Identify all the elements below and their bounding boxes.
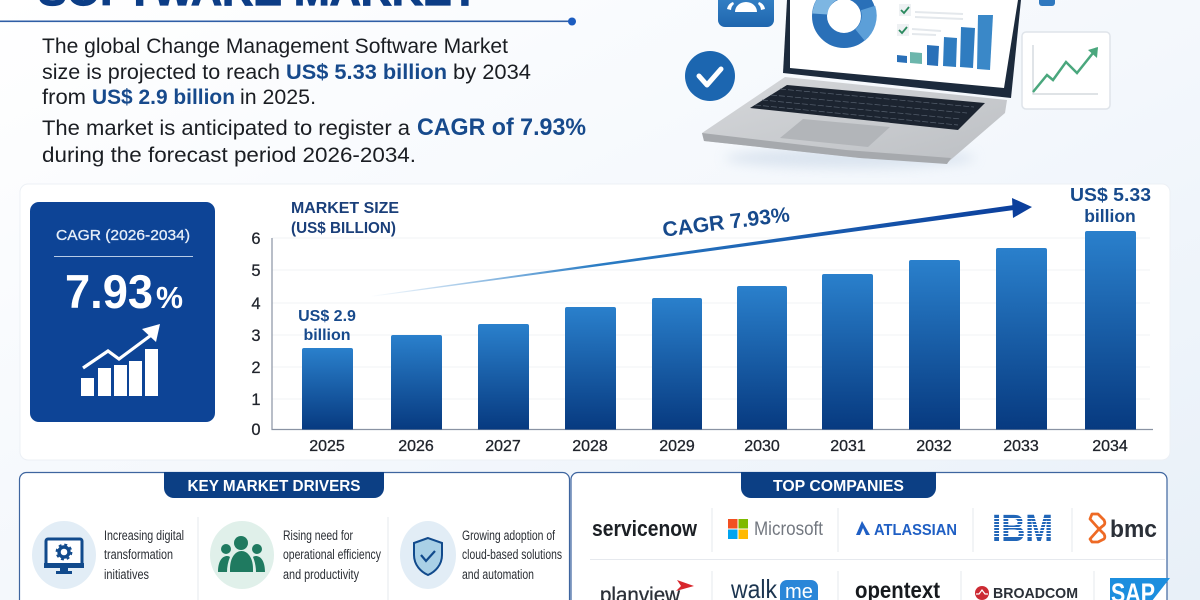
chart axis and grid: 6	[251, 230, 261, 248]
year labels: 2033	[1003, 438, 1039, 455]
CAGR trend arrow	[370, 198, 1032, 297]
intro text: from	[42, 86, 86, 109]
driver: digital transformation: Increasing digital	[104, 528, 184, 543]
screen bar chart	[897, 15, 993, 70]
driver: operational efficiency: Rising need for	[283, 528, 353, 543]
driver: cloud adoption: cloud-based solutions	[462, 547, 562, 562]
logo: BMC: bmc	[1110, 516, 1157, 543]
panel: CAGR card	[30, 202, 215, 422]
laptop shadow	[725, 148, 975, 168]
chart axis and grid: 5	[251, 262, 261, 280]
chart axis and grid: 4	[251, 295, 261, 313]
intro text: during the forecast period 2026-2034.	[42, 144, 416, 167]
year labels: 2034	[1092, 438, 1128, 455]
panel: key market drivers	[20, 472, 570, 600]
icon: monitor gear	[32, 521, 96, 589]
laptop illustration	[702, 0, 1021, 168]
label: 2025 value: billion	[303, 327, 351, 344]
logo: WalkMe	[730, 574, 818, 600]
label: 2034 value	[1070, 184, 1151, 226]
icon: check badge	[685, 51, 735, 101]
logo: Planview	[600, 580, 694, 600]
label: 2034 value: US$ 5.33	[1070, 184, 1151, 205]
intro text: by 2034	[453, 61, 531, 84]
icon: rising bars	[81, 324, 160, 396]
icon: people tile	[718, 0, 774, 27]
year labels: 2026	[398, 438, 434, 455]
heading: key market drivers: KEY MARKET DRIVERS	[188, 478, 360, 495]
heading: top companies	[741, 472, 936, 498]
icon: people	[210, 521, 274, 589]
year labels: 2025	[309, 438, 345, 455]
chart axis and grid	[251, 230, 1153, 439]
year labels	[309, 438, 1128, 455]
intro text: size is projected to reach	[42, 61, 280, 84]
chart axis and grid: 1	[251, 391, 261, 409]
label: 2025 value	[298, 308, 356, 344]
bar chart	[302, 231, 1136, 430]
growth card	[1022, 32, 1110, 109]
chart axis and grid: 0	[251, 421, 261, 439]
label: 2025 value: US$ 2.9	[298, 308, 356, 325]
chart axis and grid: 3	[251, 327, 261, 345]
label: 2034 value: billion	[1084, 206, 1136, 226]
driver: cloud adoption: and automation	[462, 567, 534, 582]
logo: Atlassian: ATLASSIAN	[874, 522, 957, 539]
intro text: The global Change Management Software Market	[42, 35, 508, 58]
intro text: US$ 5.33 billion	[286, 61, 447, 84]
intro text	[42, 35, 586, 167]
logo: IBM: IBM	[992, 508, 1053, 550]
intro text: The market is anticipated to register a	[42, 117, 410, 140]
icon: small blue tile	[1039, 0, 1055, 6]
logo: BMC	[1090, 514, 1157, 543]
year labels: 2028	[572, 438, 608, 455]
year labels: 2031	[830, 438, 866, 455]
driver: operational efficiency	[210, 521, 381, 589]
year labels: 2032	[916, 438, 952, 455]
chart title	[291, 200, 399, 237]
laptop screen	[783, 0, 1021, 98]
heading: key market drivers	[164, 472, 384, 498]
panel: top companies	[571, 472, 1170, 600]
intro text: US$ 2.9 billion	[92, 86, 235, 109]
chart title: (US$ BILLION)	[291, 220, 396, 237]
panel: CAGR card: %	[156, 280, 183, 315]
icon: shield check	[400, 521, 456, 589]
year labels: 2027	[485, 438, 521, 455]
heading: top companies: TOP COMPANIES	[773, 478, 904, 495]
title rule with dot	[0, 18, 576, 26]
year labels: 2030	[744, 438, 780, 455]
driver: cloud adoption: Growing adoption of	[462, 528, 555, 543]
checklist	[897, 4, 963, 36]
logo: Microsoft: Microsoft	[754, 519, 824, 540]
chart title: MARKET SIZE	[291, 200, 399, 217]
driver: digital transformation	[32, 521, 184, 589]
panel: chart	[20, 184, 1170, 460]
driver: digital transformation: transformation	[104, 547, 173, 562]
donut chart	[820, 0, 869, 40]
logo: ServiceNow: servicenow	[592, 516, 698, 541]
year labels: 2029	[659, 438, 695, 455]
intro text: in 2025.	[240, 86, 316, 109]
logo: Microsoft	[728, 519, 824, 540]
panel: CAGR card: 7.93	[65, 265, 153, 318]
driver: operational efficiency: and productivity	[283, 567, 359, 582]
driver: digital transformation: initiatives	[104, 567, 149, 582]
CAGR arrow label: CAGR 7.93%	[661, 203, 791, 242]
driver: cloud adoption	[400, 521, 562, 589]
intro text: CAGR of 7.93%	[417, 114, 586, 141]
chart axis and grid: 2	[251, 359, 261, 377]
laptop base	[702, 77, 1007, 164]
panel: CAGR card: CAGR (2026-2034)	[56, 227, 190, 244]
driver: operational efficiency: operational efficiency	[283, 547, 381, 562]
